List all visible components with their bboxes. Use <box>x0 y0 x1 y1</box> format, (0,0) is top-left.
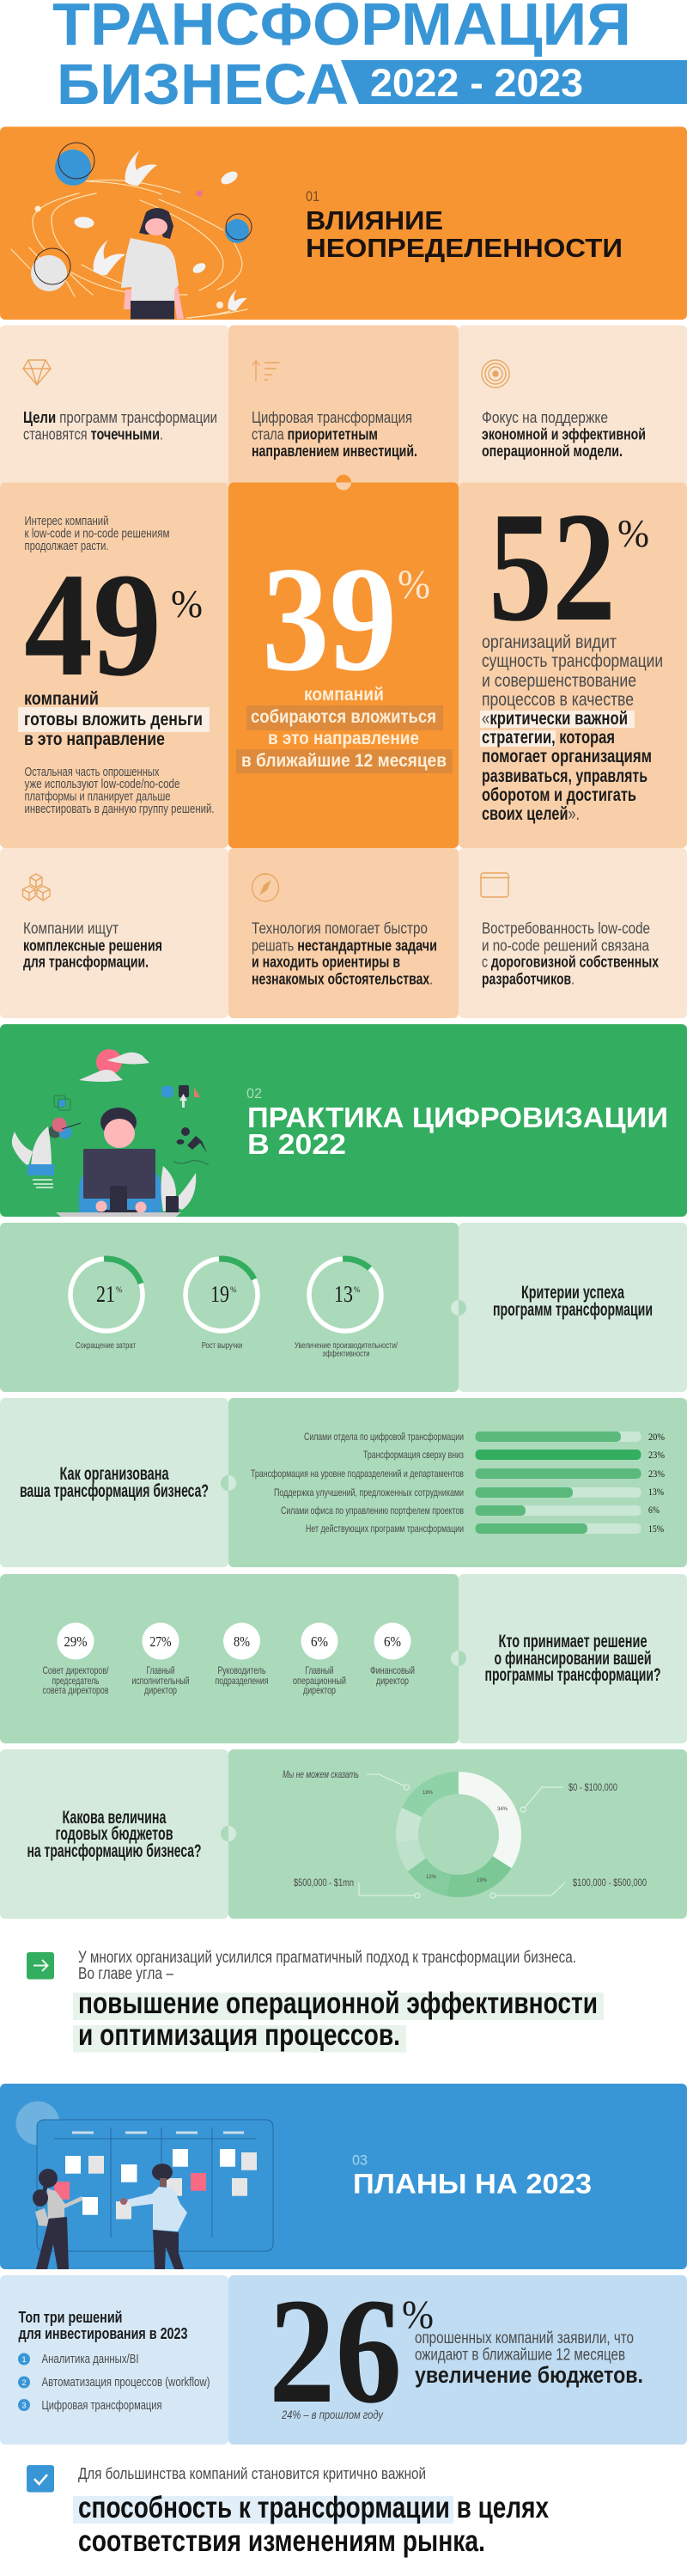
stat: 29%: 29% <box>64 1633 88 1650</box>
stat 52%: процессов в качестве <box>482 690 634 710</box>
stat 39%: 39 <box>262 535 397 702</box>
ring chart: 19%: 19 <box>210 1281 229 1307</box>
icon: cubes <box>22 874 50 900</box>
bar chart <box>251 1431 665 1535</box>
list item 2 <box>18 2375 210 2390</box>
stat 39%: % <box>398 562 430 607</box>
text: card 5 <box>252 919 437 988</box>
connector <box>221 1826 236 1841</box>
text: card 6 <box>482 919 660 988</box>
text: card 2 <box>252 408 417 460</box>
section heading: ПРАКТИКА ЦИФРОВИЗАЦИИ <box>247 1102 668 1133</box>
panel: success criteria <box>0 1223 687 1392</box>
list item 1 <box>18 2352 139 2366</box>
bar chart: 23% <box>648 1449 665 1461</box>
ring chart: 13%: 13 <box>334 1281 353 1307</box>
text: card 6: разработчиков. <box>482 969 575 988</box>
callout: operational efficiency <box>27 1948 604 2052</box>
list item 3 <box>18 2398 161 2413</box>
bar chart: Силами офиса по управлению портфелем проектов <box>281 1505 464 1517</box>
ring chart: 21%: Сокращение затрат <box>76 1340 136 1351</box>
leader: $0 - $100,000 <box>520 1781 617 1812</box>
text: card 4: для трансформации. <box>23 952 149 971</box>
text: card 1: Цели программ трансформации <box>23 408 217 426</box>
section heading: ПЛАНЫ НА 2023 <box>353 2169 592 2200</box>
stat: 8%: Руководитель <box>218 1664 266 1676</box>
heading <box>484 1632 661 1685</box>
stat: 8%: 8% <box>234 1633 250 1650</box>
stat: 29%: председатель <box>52 1675 100 1687</box>
text: card 5: незнакомых обстоятельствах. <box>252 969 433 988</box>
stat: 6% finance <box>370 1622 415 1687</box>
heading: для инвестирования в 2023 <box>19 2324 187 2342</box>
stat: 29% <box>43 1622 109 1696</box>
stat 52%: 52 <box>489 479 616 654</box>
leader: $500,000 - $1mn <box>294 1877 420 1898</box>
ring chart: 13%: эффективности <box>323 1349 370 1359</box>
donut value labels <box>423 1791 508 1883</box>
bar chart: 15% <box>648 1523 664 1535</box>
heading: Какова величина <box>62 1808 167 1828</box>
panel: bottom cards row <box>0 848 687 1018</box>
text: card 4: комплексные решения <box>23 937 162 954</box>
stat 49%: компаний <box>24 688 99 709</box>
stat 49%: уже используют low-code/no-code <box>24 778 180 791</box>
stat: 6% operations: операционный <box>293 1675 346 1687</box>
stat 26%: увеличение бюджетов. <box>415 2362 643 2388</box>
stat: 6% finance: 6% <box>384 1633 401 1650</box>
list item 1: 1 <box>21 2355 27 2364</box>
text: card 3: Фокус на поддержке <box>482 408 608 426</box>
list item 1: Аналитика данных/BI <box>41 2352 139 2366</box>
illustration: man at monitor <box>12 1049 209 1217</box>
stat: 29%: Совет директоров/ <box>43 1664 109 1676</box>
icon: window <box>481 873 509 897</box>
donut chart <box>407 1783 510 1886</box>
donut value labels: 18% <box>423 1791 434 1796</box>
title <box>52 0 687 117</box>
stat 49%: инвестировать в данную группу решений. <box>24 803 215 816</box>
stat 26%: 24% – в прошлом году <box>281 2408 384 2421</box>
ring chart: 19%: Рост выручки <box>202 1340 242 1351</box>
section heading <box>306 205 623 263</box>
ring chart: 21%: 21 <box>96 1281 115 1307</box>
stat: 27%: 27% <box>149 1633 172 1650</box>
donut value labels: 12% <box>426 1875 437 1880</box>
icon: compass <box>252 874 278 901</box>
text: card 5: Технология помогает быстро <box>252 919 428 937</box>
stat 26%: опрошенных компаний заявили, что <box>415 2329 634 2347</box>
stat: 29%: совета директоров <box>43 1684 108 1696</box>
stat 49%: % <box>171 582 203 626</box>
connector <box>336 474 351 490</box>
stat: 8% <box>215 1622 268 1687</box>
connector <box>221 2352 236 2367</box>
stat 49%: в это направление <box>24 729 165 749</box>
icon: target <box>482 360 509 388</box>
stat 49%: продолжает расти. <box>24 540 108 553</box>
heading: Как организована <box>60 1464 169 1484</box>
stat 26%: 26 <box>269 2268 402 2435</box>
stat: 8%: подразделения <box>215 1675 268 1687</box>
title: 2022 - 2023 <box>370 61 583 105</box>
connector <box>451 1651 466 1666</box>
leader: $100,000 - $500,000 <box>490 1877 647 1898</box>
heading: success criteria <box>493 1283 653 1320</box>
bar chart: Поддержка улучшений, предложенных сотрудниками <box>274 1486 464 1499</box>
list item 2: Автоматизация процессов (workflow) <box>41 2375 210 2390</box>
stat 49%: Интерес компаний <box>24 515 108 528</box>
callout: operational efficiency: и оптимизация процессов. <box>78 2018 400 2052</box>
heading: на трансформацию бизнеса? <box>27 1841 201 1861</box>
heading: ваша трансформация бизнеса? <box>20 1481 209 1501</box>
text: card 4: Компании ищут <box>23 919 119 937</box>
text: card 1 <box>23 408 217 443</box>
heading: success criteria: Критерии успеха <box>521 1283 624 1303</box>
callout: ability to transform: соответствия изменениям рынка. <box>78 2524 485 2558</box>
section number: 03 <box>352 2152 368 2169</box>
ring chart: 13%: Увеличение производительности/ <box>295 1340 398 1351</box>
leader: cannot say <box>283 1770 409 1790</box>
text: card 3 <box>482 408 646 460</box>
stat 26%: ожидают в ближайшие 12 месяцев <box>415 2346 625 2365</box>
stat 39% <box>236 535 453 773</box>
callout: ability to transform: Для большинства компаний становится критично важной <box>78 2464 426 2482</box>
stat 52%: оборотом и достигать <box>482 785 636 805</box>
callout: ability to transform: способность к трансформации в целях <box>78 2491 549 2524</box>
stat 39%: в ближайшие 12 месяцев <box>241 750 447 771</box>
text: card 2: стала приоритетным <box>252 424 378 443</box>
stat 39%: собираются вложиться <box>251 706 436 727</box>
ring chart: 19%: % <box>230 1285 237 1294</box>
text: card 6: и no-code решений связана <box>482 937 650 954</box>
stat: 6% finance: директор <box>376 1675 409 1687</box>
leader: cannot say: Мы не можем сказать <box>283 1770 359 1780</box>
stat: 6% operations: Главный <box>306 1664 333 1676</box>
panel: top cards row <box>0 325 687 488</box>
stat 52% <box>480 479 663 824</box>
panel: section 01 banner <box>0 127 687 320</box>
panel: section 02 banner <box>0 1024 687 1217</box>
section number: 01 <box>306 188 319 204</box>
section number: 02 <box>246 1085 262 1102</box>
bar chart: Трансформация на уровне подразделений и департаментов <box>251 1468 464 1480</box>
donut value labels: 34% <box>497 1807 508 1812</box>
callout: operational efficiency: Во главе угла – <box>78 1964 173 1983</box>
stat 52%: стратегии, которая <box>482 728 615 748</box>
text: card 2: Цифровая трансформация <box>252 408 412 426</box>
ring chart: 13%: % <box>354 1285 361 1294</box>
stat: 27%: директор <box>144 1684 177 1696</box>
heading <box>19 2308 187 2342</box>
leader: $0 - $100,000: $0 - $100,000 <box>568 1781 617 1793</box>
list item 3: Цифровая трансформация <box>41 2398 161 2413</box>
text: card 1: становятся точечными. <box>23 424 163 443</box>
text: card 5: решать нестандартные задачи <box>252 937 437 954</box>
donut value labels: 19% <box>477 1878 488 1883</box>
section heading: ВЛИЯНИЕ <box>306 205 443 235</box>
connector <box>221 1475 236 1491</box>
callout: ability to transform <box>27 2464 549 2558</box>
text: card 6: Востребованность low-code <box>482 919 650 937</box>
stat 26% <box>269 2268 643 2435</box>
title: БИЗНЕСА <box>57 52 349 117</box>
stat: 6% operations: 6% <box>311 1633 328 1650</box>
section heading: НЕОПРЕДЕЛЕННОСТИ <box>306 233 623 263</box>
panel: section 03 banner <box>0 2084 687 2269</box>
icon: diamond <box>23 360 51 385</box>
heading <box>20 1464 209 1501</box>
ring chart: 21% <box>68 1256 145 1351</box>
stat 52%: своих целей». <box>482 804 580 824</box>
bar chart: Трансформация сверху вниз <box>363 1449 464 1461</box>
stat: 27%: исполнительный <box>132 1675 189 1687</box>
illustration: woman among orbits <box>11 143 252 320</box>
text: card 4 <box>23 919 162 971</box>
heading: годовых бюджетов <box>55 1824 173 1844</box>
ring chart: 21%: % <box>116 1285 123 1294</box>
text: card 2: направлением инвестиций. <box>252 442 417 460</box>
ring chart: 13% <box>295 1256 398 1359</box>
panel: who decides on funding <box>0 1574 687 1743</box>
stat 52%: и совершенствование <box>482 671 636 691</box>
stat 39%: компаний <box>304 684 384 705</box>
stat 49% <box>18 515 215 816</box>
stat 49%: Остальная часть опрошенных <box>24 766 160 779</box>
section heading: В 2022 <box>247 1128 346 1160</box>
stat: 27% <box>132 1622 189 1696</box>
heading: Топ три решений <box>19 2308 122 2326</box>
icon: arrow <box>27 1952 54 1980</box>
leader: $500,000 - $1mn: $500,000 - $1mn <box>294 1877 354 1889</box>
panel: stats row <box>0 474 687 848</box>
icon: check <box>27 2465 54 2492</box>
stat: 27%: Главный <box>146 1664 175 1676</box>
stat: 6% finance: Финансовый <box>370 1664 415 1676</box>
stat 49%: готовы вложить деньги <box>24 709 203 729</box>
bar chart: 6% <box>648 1504 660 1516</box>
stat 52%: % <box>617 511 649 555</box>
bar chart: 13% <box>648 1486 664 1498</box>
section heading <box>247 1102 668 1160</box>
stat 52%: организаций видит <box>482 632 617 652</box>
panel: budget size <box>0 1749 687 1919</box>
stat 49%: платформы и планирует дальше <box>24 791 170 804</box>
bar chart: Нет действующих программ трансформации <box>306 1523 464 1535</box>
panel: top three solutions <box>0 2268 687 2445</box>
bar chart: 23% <box>648 1468 665 1480</box>
stat: 6% operations: директор <box>303 1684 336 1696</box>
text: card 3: операционной модели. <box>482 442 623 460</box>
bar chart: Силами отдела по цифровой трансформации <box>304 1431 464 1443</box>
illustration: planning board <box>15 2102 273 2269</box>
list item 2: 2 <box>21 2378 27 2387</box>
panel: how transformation is organised <box>0 1398 687 1567</box>
ring chart: 19% <box>183 1256 260 1351</box>
text: card 5: и находить ориентиры в <box>252 952 400 971</box>
bar chart: 20% <box>648 1431 665 1443</box>
stat 39%: в это направление <box>268 728 419 748</box>
stat 52%: «критически важной <box>482 709 628 729</box>
stat 26%: % <box>402 2292 434 2337</box>
stat 49%: 49 <box>24 543 161 707</box>
connector <box>451 1300 466 1315</box>
stat: 6% operations <box>293 1622 346 1696</box>
stat 49%: к low-code и no-code решениям <box>24 528 170 541</box>
list item 3: 3 <box>21 2401 27 2409</box>
leader: $100,000 - $500,000: $100,000 - $500,000 <box>573 1877 647 1889</box>
icon: sort arrow <box>252 361 279 381</box>
heading <box>27 1808 201 1861</box>
